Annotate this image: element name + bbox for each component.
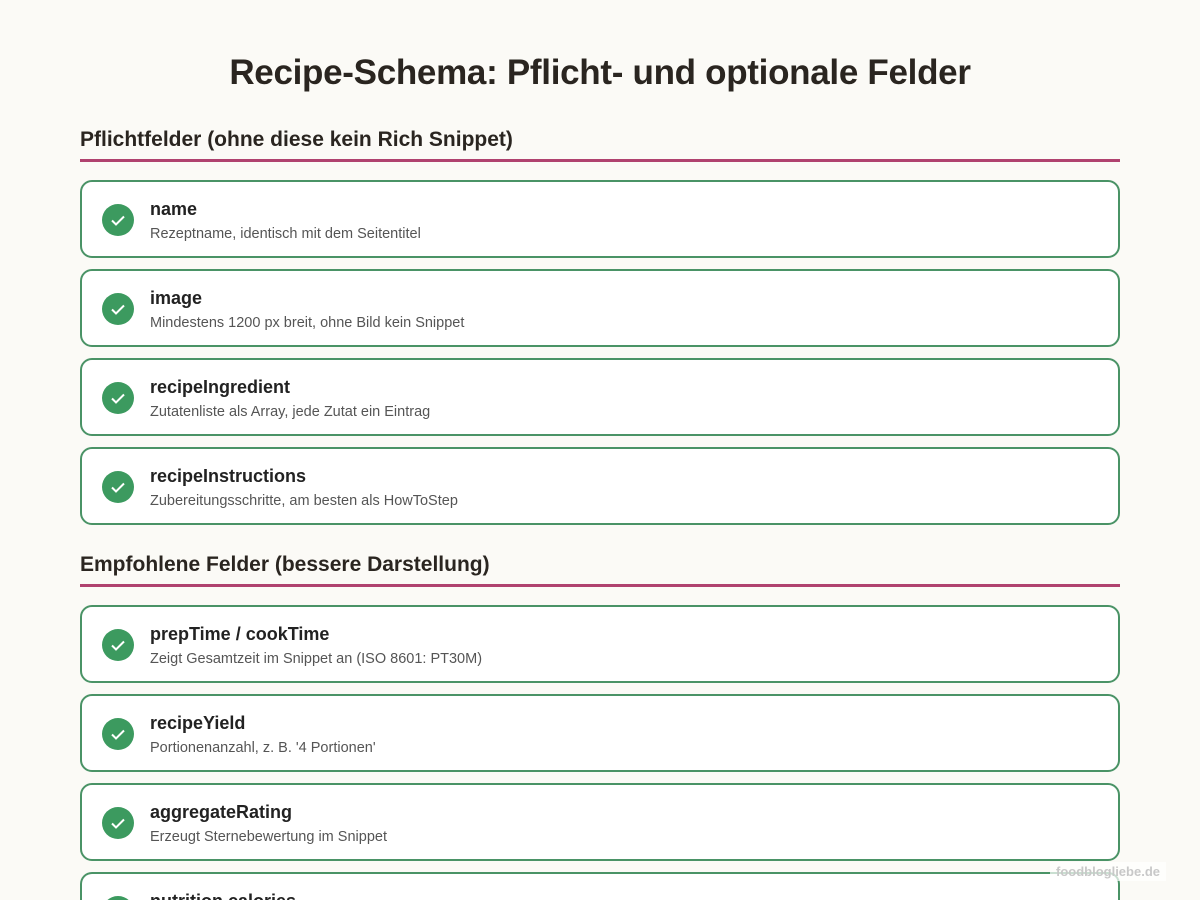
card: prepTime: Zeigt Gesamtzeit im Snippet an (ISO 8601: PT30M) (150, 651, 482, 667)
card: recipeYield (80, 694, 1120, 772)
card: image (80, 269, 1120, 347)
card: recipeInstructions: Zubereitungsschritte, am besten als HowToStep (150, 493, 458, 509)
card: nutrition.calories (cut off) (80, 872, 1120, 900)
title: Recipe-Schema: Pflicht- und optionale Felder (229, 53, 971, 92)
card: recipeYield: Portionenanzahl, z. B. '4 Portionen' (150, 740, 376, 756)
card: recipeInstructions (80, 447, 1120, 525)
card: image: Mindestens 1200 px breit, ohne Bild kein Snippet (150, 315, 464, 331)
card: name: Rezeptname, identisch mit dem Seitentitel (150, 226, 421, 242)
heading: Empfohlene Felder: Empfohlene Felder (bessere Darstellung) (80, 553, 490, 576)
card: recipeInstructions: recipeInstructions (150, 466, 306, 486)
card: aggregateRating (80, 783, 1120, 861)
heading: Pflichtfelder: Pflichtfelder (ohne diese kein Rich Snippet) (80, 128, 513, 151)
card: name: name (150, 199, 197, 219)
card: recipeYield: recipeYield (150, 713, 245, 733)
card: name (80, 180, 1120, 258)
card: aggregateRating: aggregateRating (150, 802, 292, 822)
card: prepTime: prepTime / cookTime (150, 624, 329, 644)
card: recipeIngredient: recipeIngredient (150, 377, 290, 397)
card: aggregateRating: Erzeugt Sternebewertung im Snippet (150, 829, 387, 845)
card: recipeIngredient: Zutatenliste als Array, jede Zutat ein Eintrag (150, 404, 430, 420)
heading: Pflichtfelder (80, 130, 1120, 162)
card: prepTime (80, 605, 1120, 683)
watermark: foodblogliebe.de (1056, 864, 1160, 879)
card: recipeIngredient (80, 358, 1120, 436)
card: image: image (150, 288, 202, 308)
heading: Empfohlene Felder (80, 555, 1120, 587)
